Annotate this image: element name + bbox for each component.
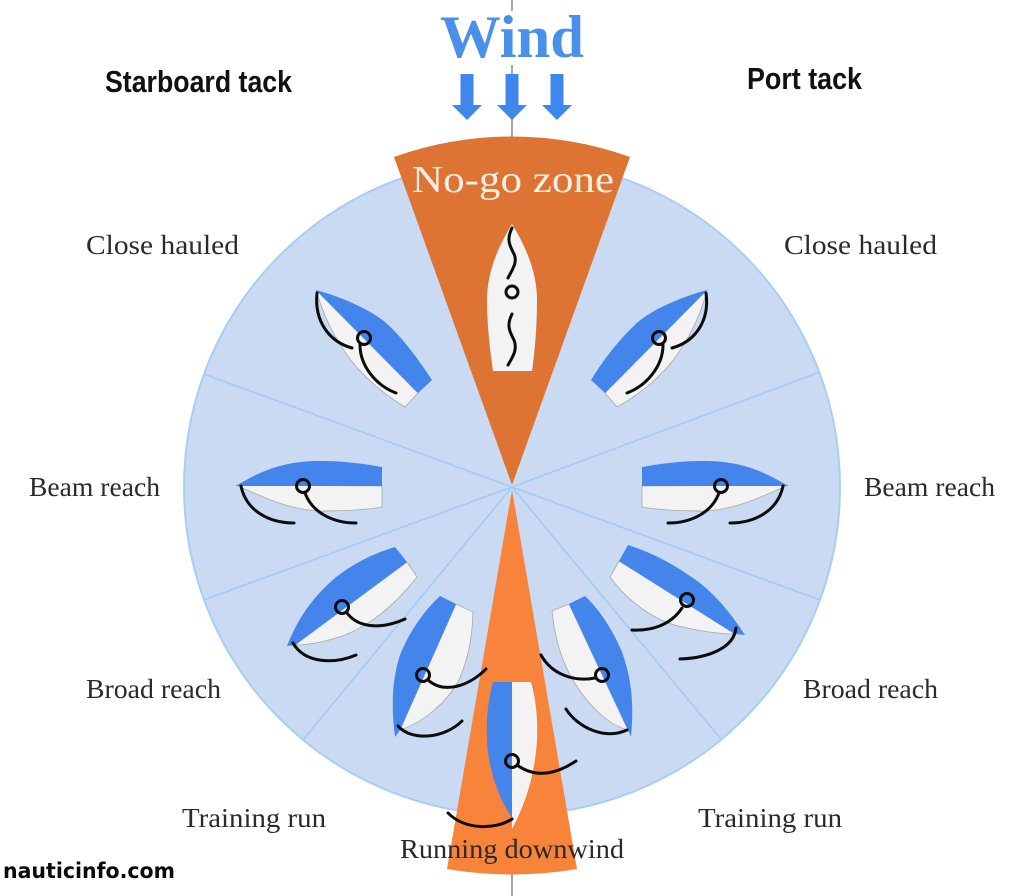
label: close hauled starboard: Close hauled <box>86 230 240 260</box>
heading: Starboard tack: Starboard tack <box>105 64 293 99</box>
icon: wind arrows <box>452 74 572 120</box>
boat: no-go zone <box>487 224 537 371</box>
watermark: nauticinfo.com: nauticinfo.com <box>3 859 175 883</box>
boat: broad reach port <box>610 545 745 659</box>
heading: Port tack: Port tack <box>747 61 863 96</box>
boat: training run starboard <box>393 596 486 737</box>
boat: training run port <box>541 596 632 737</box>
boat: broad reach starboard <box>287 547 417 661</box>
boat: beam reach starboard <box>236 461 382 523</box>
label: close hauled port: Close hauled <box>784 230 938 260</box>
panel: no-go zone wedge <box>394 137 630 485</box>
label: broad reach port: Broad reach <box>803 674 939 704</box>
panel: running downwind wedge <box>447 490 577 874</box>
boat: running downwind <box>448 682 576 829</box>
label: beam reach port: Beam reach <box>864 472 996 502</box>
boat: beam reach port <box>642 461 788 523</box>
label: training run port: Training run <box>698 803 843 833</box>
label: broad reach starboard: Broad reach <box>86 674 222 704</box>
label: running downwind: Running downwind <box>400 834 625 864</box>
boat: close hauled port <box>591 290 707 407</box>
label: beam reach starboard: Beam reach <box>29 472 161 502</box>
panel: sailing circle <box>184 159 840 815</box>
heading: No-go zone: No-go zone <box>412 159 614 201</box>
label: training run starboard: Training run <box>182 803 327 833</box>
title: Wind: Wind <box>440 4 584 70</box>
boat: close hauled starboard <box>316 290 432 407</box>
